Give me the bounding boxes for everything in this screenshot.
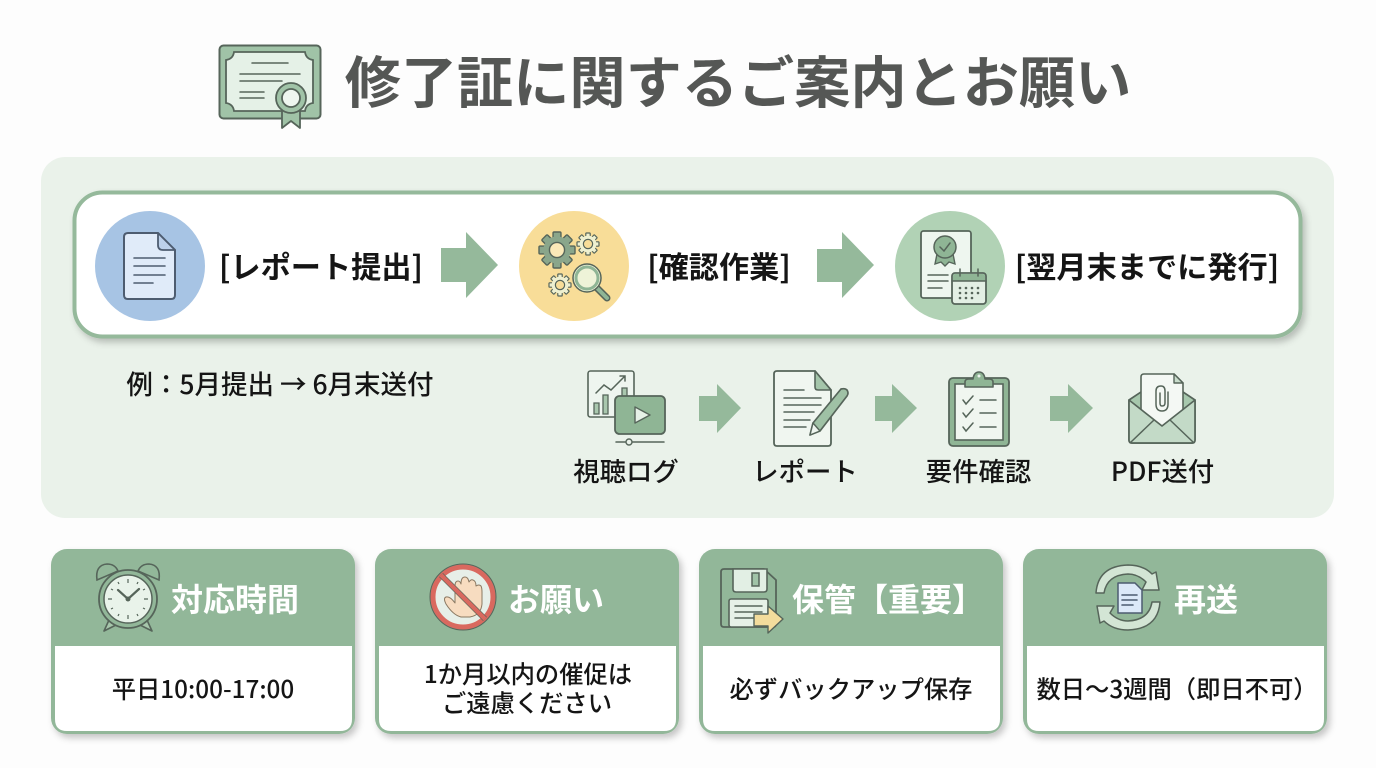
icon: resend arrows — [1096, 565, 1160, 630]
step: report submission — [95, 211, 423, 321]
step: viewing log — [573, 371, 679, 489]
arrow — [699, 384, 741, 433]
body: 必ずバックアップ保存 — [730, 670, 972, 705]
step: report — [752, 371, 858, 489]
sub flow — [573, 371, 1214, 489]
arrow — [817, 232, 874, 298]
body — [424, 655, 632, 719]
icon: no hand — [430, 564, 496, 630]
icon: floppy disk — [721, 569, 783, 633]
label: [翌月末までに発行] — [1015, 243, 1279, 287]
card: hours — [51, 549, 355, 734]
step: PDF delivery — [1111, 374, 1214, 489]
label: PDF送付 — [1111, 450, 1214, 489]
icon: gears and magnifier — [519, 211, 629, 321]
arrow — [1050, 384, 1093, 433]
card: storage — [699, 549, 1003, 734]
icon: clipboard — [949, 372, 1009, 446]
header: icon and title — [220, 39, 1131, 128]
icon: certificate — [220, 46, 320, 128]
arrow — [441, 232, 498, 298]
icon: chart and video — [588, 371, 665, 445]
heading: お願い — [508, 575, 604, 621]
body: 1か月以内の催促は — [424, 655, 632, 690]
body: 数日〜3週間（即日不可） — [1036, 670, 1318, 705]
label: 要件確認 — [926, 450, 1031, 489]
step: requirement check — [926, 372, 1031, 489]
card: resend — [1023, 549, 1327, 734]
arrow — [875, 384, 917, 433]
heading: 保管【重要】 — [792, 575, 984, 621]
icon: alarm clock — [97, 564, 159, 631]
label: 視聴ログ — [573, 450, 679, 489]
heading: 対応時間 — [171, 575, 299, 621]
title: 修了証に関するご案内とお願い — [345, 39, 1131, 120]
icon: certificate and calendar — [895, 211, 1005, 321]
heading: 再送 — [1174, 575, 1238, 621]
icon: document and pencil — [774, 371, 848, 446]
icon: envelope and clip — [1129, 374, 1195, 443]
card: request — [375, 549, 679, 734]
body: 平日10:00-17:00 — [112, 670, 294, 705]
panel: process flow — [41, 157, 1334, 518]
step: confirmation — [519, 211, 791, 321]
body: ご遠慮ください — [442, 684, 612, 719]
label: [確認作業] — [647, 243, 791, 287]
icon: document — [95, 211, 205, 321]
main flow card — [74, 192, 1300, 336]
step: issue — [895, 211, 1279, 321]
example note: 例：5月提出 → 6月末送付 — [126, 363, 434, 402]
label: レポート — [752, 450, 858, 489]
label: [レポート提出] — [219, 243, 423, 287]
